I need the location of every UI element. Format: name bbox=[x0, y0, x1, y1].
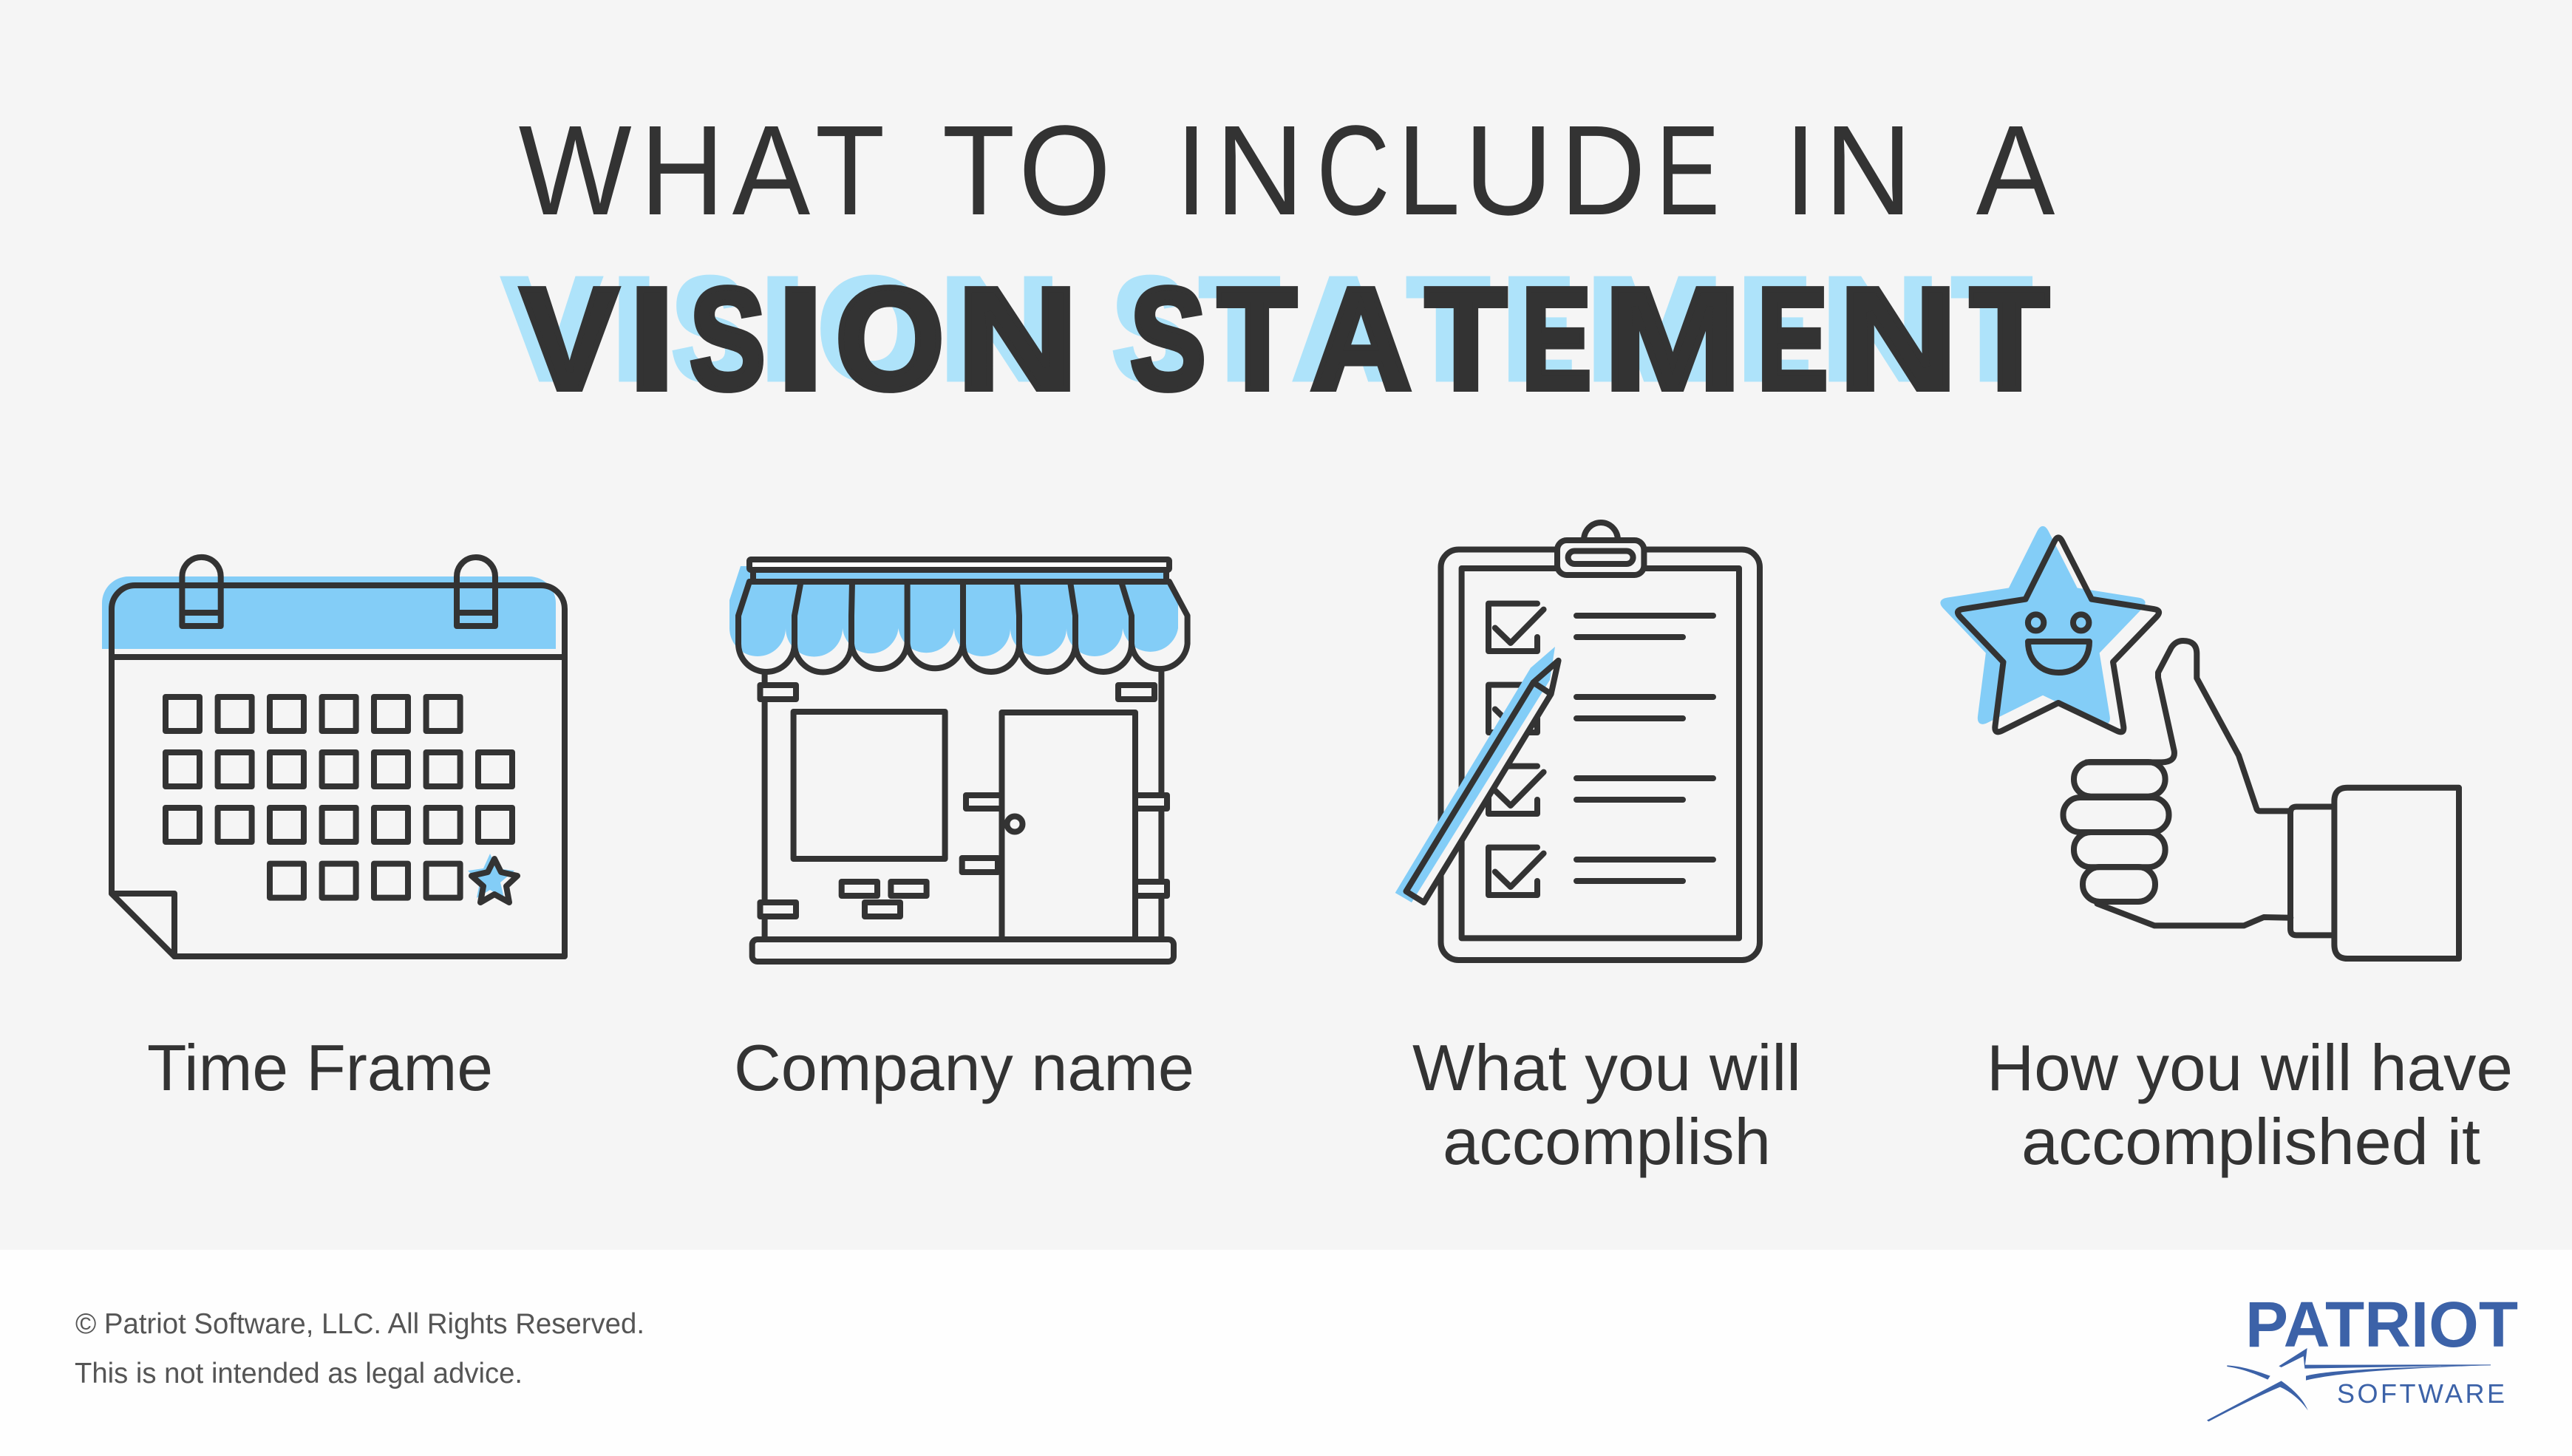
title line 1: E bbox=[1656, 98, 1720, 242]
title line 2: I bbox=[629, 258, 675, 420]
title line 1: N bbox=[1824, 98, 1913, 242]
label: how you will have accomplished it: accomplished it bbox=[2021, 1105, 2480, 1178]
logo: patriot software: SOFTWARE bbox=[2337, 1378, 2505, 1409]
title line 2: V bbox=[521, 258, 618, 420]
icon: calendar bbox=[102, 557, 565, 956]
title line 2 shadow: T bbox=[1200, 248, 1279, 409]
title line 2: N bbox=[1839, 258, 1957, 420]
title line 2 shadow: E bbox=[1503, 248, 1574, 409]
title line 2: I bbox=[778, 258, 823, 420]
label: what you will accomplish: What you will bbox=[1412, 1031, 1801, 1104]
title line 1: D bbox=[1560, 98, 1646, 242]
title line 2: E bbox=[1757, 258, 1828, 420]
copyright text: This is not intended as legal advice. bbox=[75, 1358, 523, 1389]
title line 1: C bbox=[1316, 98, 1390, 242]
title line 1: H bbox=[640, 98, 724, 242]
title line 2: S bbox=[1130, 258, 1206, 420]
logo star swoosh bbox=[2207, 1348, 2491, 1421]
copyright text bbox=[75, 1308, 644, 1389]
title bbox=[503, 98, 2055, 420]
title line 1: T bbox=[942, 98, 1015, 242]
title line 2 shadow: E bbox=[1739, 248, 1811, 409]
icon: storefront bbox=[729, 559, 1188, 962]
title line 2: T bbox=[1217, 258, 1296, 420]
icon: thumbs up with star bbox=[1942, 528, 2459, 959]
title line 1: N bbox=[1215, 98, 1304, 242]
icon: smiling star bbox=[1942, 528, 2159, 732]
title line 2 shadow: I bbox=[611, 248, 657, 409]
icon: pencil bbox=[1395, 647, 1559, 902]
icon: calendar star bbox=[468, 854, 517, 902]
title line 2 bbox=[521, 258, 2049, 420]
title line 1 bbox=[519, 98, 2055, 242]
title line 2 shadow: S bbox=[672, 248, 748, 409]
title line 1: A bbox=[1976, 98, 2055, 242]
title line 2 shadow: O bbox=[817, 248, 927, 409]
title line 2: N bbox=[957, 258, 1078, 420]
icon: clipboard checklist bbox=[1395, 523, 1760, 960]
title line 1: O bbox=[1018, 98, 1111, 242]
title line 2: T bbox=[1425, 258, 1507, 420]
title line 2: S bbox=[690, 258, 766, 420]
title line 2: T bbox=[1970, 258, 2049, 420]
title line 2: A bbox=[1310, 258, 1412, 420]
title line 1: U bbox=[1464, 98, 1554, 242]
title line 2 shadow: N bbox=[939, 248, 1060, 409]
label: company name: Company name bbox=[734, 1031, 1194, 1104]
title line 1: L bbox=[1397, 98, 1460, 242]
footer band bbox=[0, 1250, 2572, 1456]
title line 1: I bbox=[1176, 98, 1207, 242]
label: what you will accomplish bbox=[1412, 1031, 1801, 1178]
title line 1: T bbox=[815, 98, 885, 242]
label: how you will have accomplished it bbox=[1987, 1031, 2513, 1178]
title line 2: M bbox=[1604, 258, 1741, 420]
title line 2 shadow: T bbox=[1952, 248, 2031, 409]
title line 1: A bbox=[732, 98, 811, 242]
label: what you will accomplish: accomplish bbox=[1443, 1105, 1771, 1178]
label: time frame: Time Frame bbox=[147, 1031, 493, 1104]
title line 2: E bbox=[1521, 258, 1591, 420]
title line 2 shadow bbox=[503, 248, 2031, 409]
title line 2 shadow: A bbox=[1293, 248, 1394, 409]
title line 2 shadow: M bbox=[1586, 248, 1724, 409]
title line 2: O bbox=[835, 258, 945, 420]
title line 2 shadow: S bbox=[1112, 248, 1188, 409]
label: how you will have accomplished it: How you will have bbox=[1987, 1031, 2513, 1104]
logo: patriot software bbox=[2207, 1289, 2518, 1421]
title line 1: W bbox=[519, 98, 632, 242]
title line 2 shadow: N bbox=[1821, 248, 1939, 409]
title line 2 shadow: T bbox=[1407, 248, 1489, 409]
title line 2 shadow: I bbox=[760, 248, 806, 409]
logo: patriot software: PATRIOT bbox=[2245, 1289, 2518, 1361]
title line 1: I bbox=[1785, 98, 1816, 242]
title line 2 shadow: V bbox=[503, 248, 600, 409]
copyright text: © Patriot Software, LLC. All Rights Reserved. bbox=[75, 1308, 644, 1340]
